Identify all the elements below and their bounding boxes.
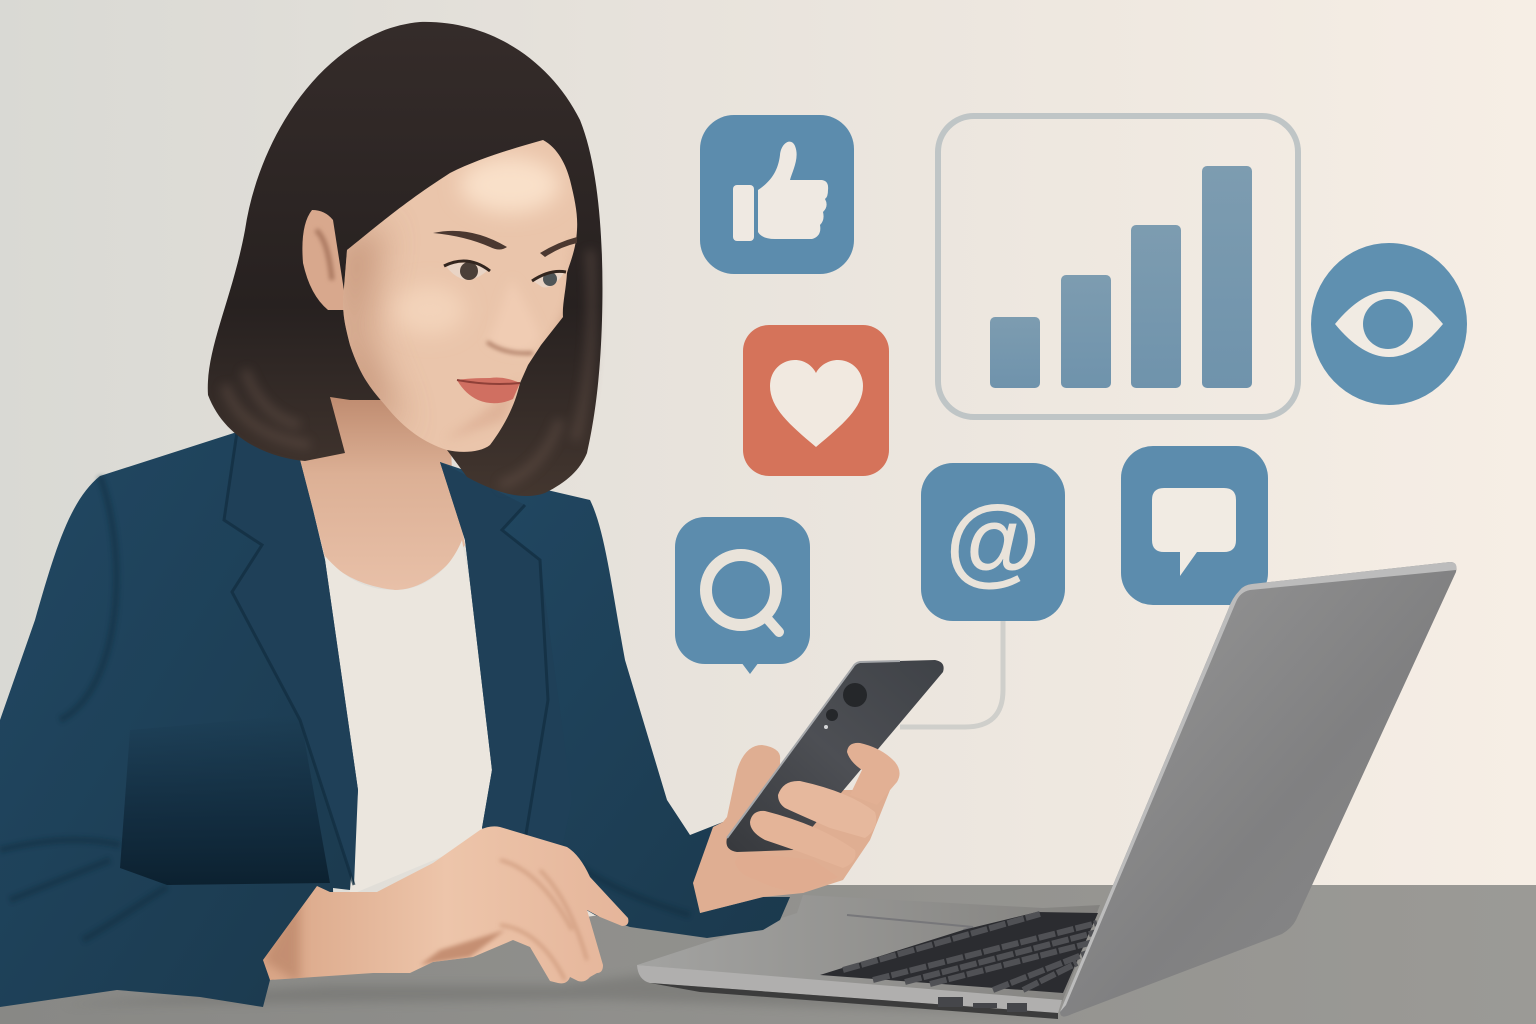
laptop lid: [1060, 562, 1456, 1017]
right lapel: [440, 462, 572, 860]
phone: [726, 660, 944, 852]
table shadow: [60, 975, 1060, 1015]
hair: [208, 22, 602, 496]
face shading: [335, 225, 405, 430]
icon: search bubble: [675, 517, 810, 674]
left hand on table: [263, 826, 628, 985]
eyebrows: [433, 231, 577, 257]
laptop front edge: [637, 965, 1062, 1013]
table: [0, 885, 1536, 1024]
eyes: [446, 263, 564, 287]
left lapel: [224, 432, 358, 885]
nose: [488, 280, 540, 353]
middle finger: [778, 781, 876, 838]
sleeve folds: [0, 476, 690, 940]
ear: [302, 210, 347, 310]
ring finger: [750, 811, 856, 868]
icon: eye: [1311, 243, 1467, 405]
icon: speech bubble: [1121, 446, 1268, 605]
phone camera: [824, 683, 867, 729]
blazer inner shadow: [120, 715, 330, 885]
hand shading: [420, 930, 505, 965]
panel: bar chart: [938, 116, 1298, 417]
index finger: [847, 743, 900, 805]
laptop deck: [637, 895, 1100, 1002]
woman: [0, 22, 944, 1007]
at sign glyph: @: [945, 485, 1041, 595]
trackpad: [847, 915, 973, 930]
right hand fingers: [735, 743, 900, 893]
lips: [457, 378, 520, 403]
hair highlights: [225, 250, 592, 485]
white shirt: [325, 540, 492, 895]
keyboard: [820, 912, 1098, 993]
icon: at sign: [921, 463, 1065, 621]
laptop: [637, 562, 1456, 1019]
right hand palm and thumb: [693, 745, 890, 913]
face: [343, 140, 578, 452]
icon: heart: [743, 325, 889, 476]
connector line from phone to at-sign icon: [900, 620, 1003, 727]
icon: thumbs up: [700, 115, 854, 274]
laptop ports: [938, 997, 1027, 1012]
blazer: [0, 432, 790, 1007]
little finger: [735, 853, 838, 893]
blazer body and sleeves: [0, 432, 358, 1007]
neck: [296, 380, 465, 590]
hair mass: [208, 22, 602, 496]
